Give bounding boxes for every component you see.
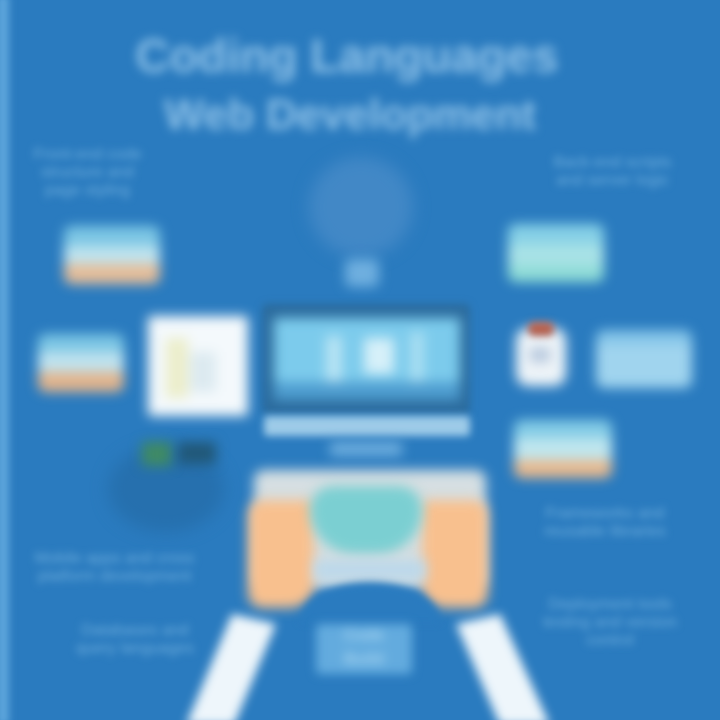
right sleeve — [450, 608, 555, 720]
card: upper left — [64, 226, 160, 284]
panel: white document — [148, 316, 248, 416]
icon: dark globe — [108, 434, 224, 532]
screen frame — [262, 304, 470, 414]
card: middle left — [38, 334, 124, 392]
left edge strip — [0, 0, 9, 720]
title: Web Development — [164, 91, 536, 139]
right hand — [422, 500, 488, 608]
bottom curve — [300, 582, 440, 622]
text block: top left: Front-end code — [33, 146, 142, 163]
laptop stand — [330, 442, 402, 456]
text block: lower left: Mobile apps and cross — [34, 550, 195, 567]
laptop base — [264, 416, 470, 436]
card: upper right — [508, 224, 604, 282]
text block: bottom left: query languages — [76, 640, 194, 657]
text block: top right — [552, 154, 672, 190]
icon: red and white badge — [506, 316, 576, 396]
title: Coding Languages — [136, 29, 558, 82]
left sleeve — [180, 608, 282, 720]
teal screen shape — [310, 486, 422, 554]
text block: top left — [32, 146, 142, 200]
left hand — [248, 500, 314, 608]
text block: top left: page styling — [45, 182, 130, 199]
text block: lower left — [34, 550, 195, 585]
text block: bottom right — [542, 596, 677, 649]
tablet lower strip — [314, 560, 426, 580]
laptop screen — [260, 301, 473, 415]
text block: bottom right: Deployment tools — [548, 596, 672, 613]
bottom center label — [316, 624, 412, 674]
tablet with hands — [238, 460, 498, 618]
text block: lower right: reusable libraries — [544, 523, 666, 540]
text block: lower right — [544, 505, 666, 540]
text block: lower left: platform development — [38, 568, 191, 585]
screen display — [274, 318, 460, 400]
text block: bottom left — [76, 622, 194, 658]
bottom center label: Build — [344, 651, 384, 668]
text block: top left: structure and — [41, 164, 134, 181]
text block: bottom right: testing and version — [543, 614, 677, 631]
text block: top right: Back-end scripts — [553, 154, 672, 171]
text block: top right: and server logic — [556, 172, 669, 189]
card: lower right — [514, 420, 612, 478]
card: middle right — [596, 330, 692, 388]
text block: bottom left: Databases and — [81, 622, 189, 639]
text block: bottom right: control — [586, 632, 634, 649]
tablet body — [254, 470, 486, 588]
text block: lower right: Frameworks and — [545, 505, 665, 522]
title — [132, 29, 562, 142]
bottom center label: Code — [344, 627, 384, 644]
icon: light bulb — [306, 154, 416, 294]
